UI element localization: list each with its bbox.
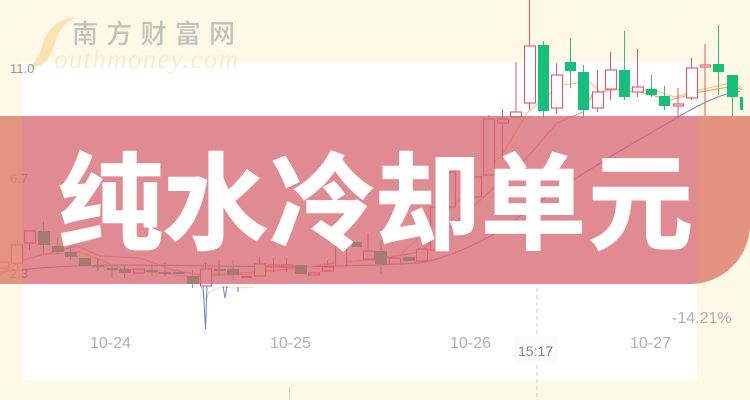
percent label: -14.21% bbox=[672, 310, 732, 327]
logo domain: outhmoney.com bbox=[54, 44, 238, 74]
title: 纯 bbox=[58, 120, 163, 272]
pink title band bbox=[0, 116, 750, 284]
title: 冷 bbox=[270, 120, 375, 272]
wicks rising bbox=[18, 0, 705, 280]
title: 水 bbox=[163, 120, 268, 272]
title: 单 bbox=[481, 120, 586, 272]
thin red candle bbox=[241, 276, 252, 278]
icon: S swoosh bbox=[29, 17, 76, 67]
label 10-27: 10-27 bbox=[630, 335, 671, 352]
wicks falling bbox=[44, 25, 732, 288]
solid falling candles bbox=[38, 45, 743, 284]
right band tint bbox=[697, 116, 750, 284]
left band tint bbox=[0, 116, 22, 284]
logo: southmoney bbox=[29, 14, 238, 74]
crosshair line bbox=[536, 288, 538, 400]
price axis label 2.3: 2.3 bbox=[10, 266, 28, 281]
panel: white chart area bbox=[22, 62, 697, 380]
title bbox=[58, 120, 693, 272]
price axis label 11.0: 11.0 bbox=[10, 61, 34, 76]
label 10-24: 10-24 bbox=[90, 335, 131, 352]
title: 元 bbox=[588, 120, 693, 272]
time tag bbox=[514, 336, 558, 362]
label 10-25: 10-25 bbox=[270, 335, 311, 352]
date axis labels bbox=[90, 335, 671, 352]
moving average lines bbox=[0, 82, 742, 277]
time tag: 15:17 bbox=[518, 343, 553, 359]
logo Chinese name: 南方财富网 bbox=[72, 14, 235, 51]
minute sparkline below band bbox=[201, 284, 255, 329]
label 10-26: 10-26 bbox=[450, 335, 491, 352]
price axis label 6.7: 6.7 bbox=[10, 171, 28, 186]
title: 却 bbox=[375, 120, 480, 272]
hollow rising candles bbox=[0, 46, 710, 286]
candlestick chart bbox=[0, 0, 743, 288]
